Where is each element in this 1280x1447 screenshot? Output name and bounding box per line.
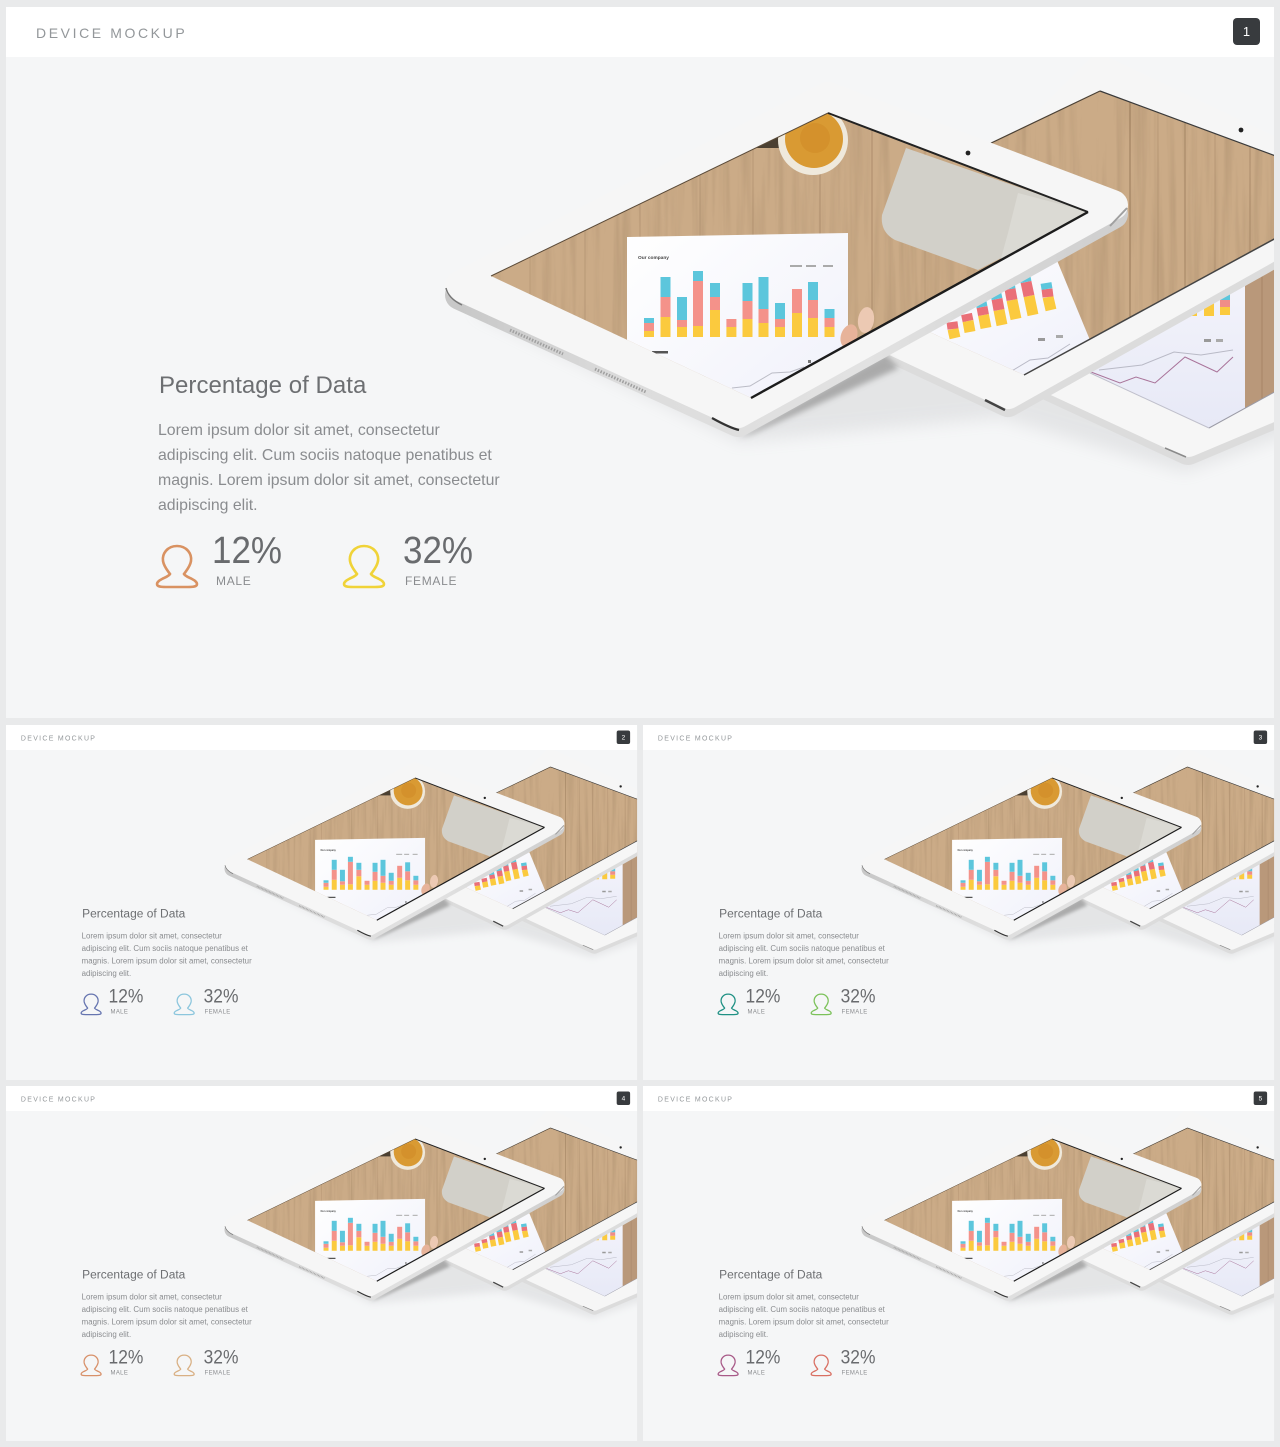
body text: adipiscing elit. bbox=[82, 970, 131, 978]
page number badge bbox=[617, 1091, 630, 1105]
page number badge: 5 bbox=[1259, 1094, 1262, 1102]
stat: male 12% bbox=[80, 986, 143, 1016]
body text: magnis. Lorem ipsum dolor sit amet, consectetur bbox=[158, 472, 500, 489]
page number badge: 4 bbox=[622, 1094, 625, 1102]
body text: adipiscing elit. bbox=[719, 1331, 768, 1339]
heading: Percentage of Data bbox=[719, 1268, 822, 1282]
page number badge: 3 bbox=[1259, 733, 1262, 741]
laptop corner bbox=[882, 148, 1090, 270]
body text: adipiscing elit. Cum sociis natoque penatibus et bbox=[719, 945, 885, 953]
page number badge: 1 bbox=[1243, 24, 1250, 39]
label: FEMALE bbox=[205, 1369, 231, 1376]
body text: adipiscing elit. Cum sociis natoque penatibus et bbox=[158, 447, 492, 464]
value: 12% bbox=[212, 530, 282, 572]
stat: male 12% bbox=[718, 1347, 780, 1376]
page number badge bbox=[1254, 730, 1267, 744]
panel: slide 1 bbox=[6, 7, 1274, 718]
body text bbox=[719, 1293, 889, 1339]
body text: Lorem ipsum dolor sit amet, consectetur bbox=[719, 1293, 859, 1302]
page number badge bbox=[1233, 18, 1260, 45]
section label: DEVICE MOCKUP bbox=[21, 734, 96, 742]
stat: female 32% bbox=[174, 1347, 238, 1376]
label: MALE bbox=[111, 1008, 128, 1015]
device illustration: three tablets bbox=[445, 90, 1274, 470]
icon: person outline bbox=[156, 544, 198, 588]
label: FEMALE bbox=[405, 574, 457, 588]
body text: magnis. Lorem ipsum dolor sit amet, consectetur bbox=[82, 1318, 252, 1327]
tablet body bbox=[460, 97, 1113, 413]
body text: adipiscing elit. Cum sociis natoque penatibus et bbox=[719, 1306, 885, 1314]
body text: adipiscing elit. Cum sociis natoque penatibus et bbox=[82, 1306, 248, 1314]
body text bbox=[82, 932, 252, 978]
page number badge bbox=[617, 730, 630, 744]
paper with bar chart: Our company bbox=[638, 255, 669, 261]
heading: Percentage of Data bbox=[719, 907, 822, 921]
body text bbox=[82, 1293, 252, 1339]
header bar bbox=[6, 1086, 637, 1111]
icon: person outline bbox=[718, 994, 739, 1016]
tablet screen photo bbox=[440, 70, 1280, 490]
body text: magnis. Lorem ipsum dolor sit amet, consectetur bbox=[719, 1318, 889, 1327]
tablet: back right bbox=[1000, 240, 1280, 457]
label: MALE bbox=[216, 574, 251, 588]
icon: person outline bbox=[810, 1354, 832, 1376]
tablet side edge bbox=[460, 106, 1113, 422]
body text: Lorem ipsum dolor sit amet, consectetur bbox=[158, 422, 440, 439]
device illustration bbox=[862, 766, 1274, 956]
body text: adipiscing elit. bbox=[158, 497, 258, 514]
icon: person outline bbox=[80, 1354, 102, 1376]
header bar bbox=[6, 7, 1274, 57]
cast shadow between front and middle tablet bbox=[738, 354, 899, 438]
value: 12% bbox=[746, 1347, 780, 1368]
header bar bbox=[643, 1086, 1274, 1111]
device illustration bbox=[224, 766, 638, 956]
body text: adipiscing elit. Cum sociis natoque penatibus et bbox=[82, 945, 248, 953]
panel: slide 4 bbox=[6, 1086, 637, 1441]
icon: person outline bbox=[174, 994, 195, 1016]
coffee cup bbox=[757, 105, 848, 175]
body text bbox=[719, 932, 889, 978]
body text: Lorem ipsum dolor sit amet, consectetur bbox=[719, 932, 859, 941]
device illustration bbox=[862, 1128, 1274, 1317]
body text: magnis. Lorem ipsum dolor sit amet, consectetur bbox=[82, 957, 252, 966]
tablet: middle bbox=[440, 70, 1280, 490]
icon: person outline bbox=[810, 994, 832, 1016]
section label: DEVICE MOCKUP bbox=[658, 1095, 733, 1103]
icon: person outline bbox=[80, 994, 102, 1016]
label: MALE bbox=[748, 1008, 765, 1015]
value: 32% bbox=[204, 1347, 238, 1368]
stat: male 12% bbox=[718, 986, 780, 1016]
header bar bbox=[6, 725, 637, 750]
heading: Percentage of Data bbox=[82, 907, 185, 921]
stat: male 12% bbox=[80, 1347, 143, 1376]
screen border lines bbox=[491, 113, 1088, 398]
body text: Lorem ipsum dolor sit amet, consectetur bbox=[82, 932, 222, 941]
camera dot bbox=[966, 151, 970, 155]
body text bbox=[158, 422, 500, 514]
icon: person outline bbox=[174, 1354, 195, 1376]
section label: DEVICE MOCKUP bbox=[658, 734, 733, 742]
hand holding paper bbox=[837, 306, 876, 350]
section label: DEVICE MOCKUP bbox=[36, 25, 187, 41]
label: FEMALE bbox=[842, 1008, 868, 1015]
label: FEMALE bbox=[205, 1008, 231, 1015]
body text: Lorem ipsum dolor sit amet, consectetur bbox=[82, 1293, 222, 1302]
device illustration bbox=[224, 1128, 638, 1317]
label: MALE bbox=[748, 1369, 765, 1376]
icon: person outline bbox=[718, 1354, 739, 1376]
heading: Percentage of Data bbox=[159, 372, 366, 399]
tablet: front bbox=[440, 70, 1280, 490]
label: MALE bbox=[111, 1369, 128, 1376]
value: 32% bbox=[204, 986, 238, 1007]
value: 12% bbox=[746, 986, 780, 1007]
section label: DEVICE MOCKUP bbox=[21, 1095, 96, 1103]
value: 12% bbox=[109, 1347, 143, 1368]
stat: male 12% bbox=[156, 530, 282, 588]
stat: female 32% bbox=[810, 986, 875, 1016]
paper with bar chart bbox=[627, 233, 848, 420]
header bar bbox=[643, 725, 1274, 750]
label: FEMALE bbox=[842, 1369, 868, 1376]
page number badge bbox=[1254, 1091, 1267, 1105]
panel: slide 2 bbox=[6, 725, 637, 1080]
stat: female 32% bbox=[174, 986, 238, 1016]
icon: person outline bbox=[342, 544, 386, 588]
corner highlight strokes bbox=[446, 208, 1127, 430]
heading: Percentage of Data bbox=[82, 1268, 185, 1282]
body text: adipiscing elit. bbox=[82, 1331, 131, 1339]
value: 32% bbox=[841, 1347, 875, 1368]
stat: female 32% bbox=[342, 530, 473, 588]
value: 12% bbox=[109, 986, 143, 1007]
panel: slide 3 bbox=[643, 725, 1274, 1080]
soft shadows under tablets bbox=[470, 300, 1280, 472]
page number badge: 2 bbox=[622, 733, 625, 741]
value: 32% bbox=[403, 530, 473, 572]
stat: female 32% bbox=[810, 1347, 875, 1376]
panel: slide 5 bbox=[643, 1086, 1274, 1441]
body text: magnis. Lorem ipsum dolor sit amet, consectetur bbox=[719, 957, 889, 966]
speaker grilles bbox=[510, 330, 646, 392]
body text: adipiscing elit. bbox=[719, 970, 768, 978]
value: 32% bbox=[841, 986, 875, 1007]
